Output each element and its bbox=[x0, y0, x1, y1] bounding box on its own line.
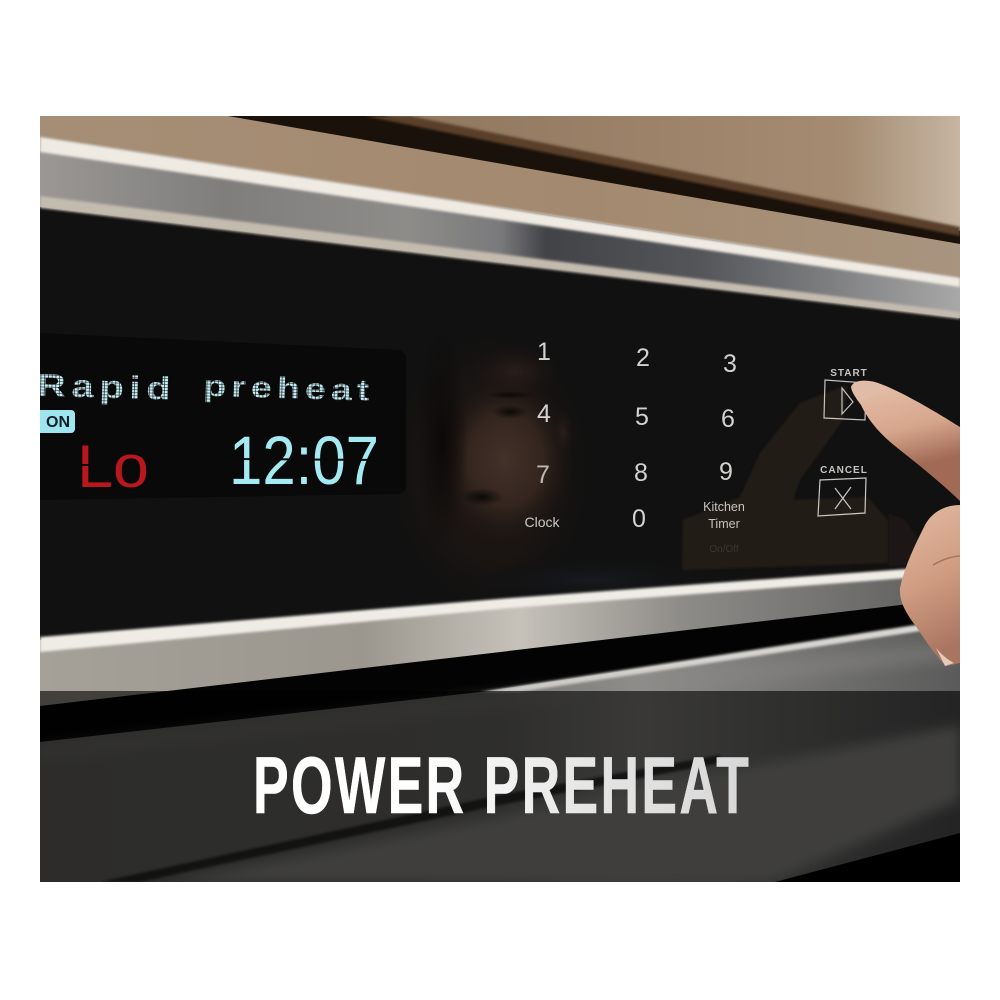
keypad numbers: 5 bbox=[635, 403, 649, 431]
keypad numbers: 2 bbox=[636, 344, 650, 372]
keypad numbers: 9 bbox=[719, 458, 733, 486]
title: POWER PREHEAT bbox=[253, 740, 751, 831]
ON badge: ON bbox=[46, 414, 70, 431]
hand edge reflection bbox=[888, 513, 917, 566]
keypad numbers: 6 bbox=[721, 405, 735, 433]
START button bbox=[824, 368, 868, 420]
display text: Rapid preheat: Rapid bbox=[36, 367, 171, 407]
photo: oven control panel bbox=[36, 116, 960, 882]
keypad numbers bbox=[536, 338, 737, 533]
caption band bbox=[40, 691, 960, 882]
index finger bbox=[851, 381, 960, 501]
infographic canvas bbox=[40, 116, 960, 882]
Clock label: Clock bbox=[524, 514, 560, 530]
woman's face reflection bbox=[440, 355, 621, 586]
keypad numbers: 0 bbox=[632, 505, 646, 533]
Kitchen Timer label bbox=[704, 502, 744, 528]
keypad numbers: 8 bbox=[634, 459, 648, 487]
lower steel section bbox=[40, 565, 960, 882]
finger reflection bbox=[682, 385, 888, 570]
fingernail bbox=[856, 397, 858, 401]
START button: START bbox=[830, 368, 868, 379]
display text: preheat word: preheat bbox=[203, 370, 370, 408]
wood cabinet bbox=[40, 116, 960, 296]
upper steel rail bbox=[40, 137, 960, 319]
Kitchen Timer label: Kitchen bbox=[703, 500, 745, 514]
keypad numbers: 3 bbox=[723, 350, 737, 378]
red Lo readout: Lo bbox=[77, 433, 149, 500]
display window bbox=[36, 333, 406, 500]
oven dark glass panel bbox=[40, 200, 960, 660]
Kitchen Timer label: Timer bbox=[708, 517, 740, 531]
keypad numbers: 7 bbox=[536, 461, 550, 489]
keypad numbers: 1 bbox=[537, 338, 551, 366]
CANCEL button bbox=[818, 465, 868, 516]
keypad numbers: 4 bbox=[537, 400, 551, 428]
CANCEL button: CANCEL bbox=[820, 465, 868, 476]
ON badge bbox=[40, 410, 75, 433]
On/Off label: On/Off bbox=[709, 544, 739, 555]
segment gaps bbox=[78, 459, 380, 465]
thumb bbox=[900, 505, 960, 666]
cyan clock readout: 12:07 bbox=[229, 422, 379, 499]
